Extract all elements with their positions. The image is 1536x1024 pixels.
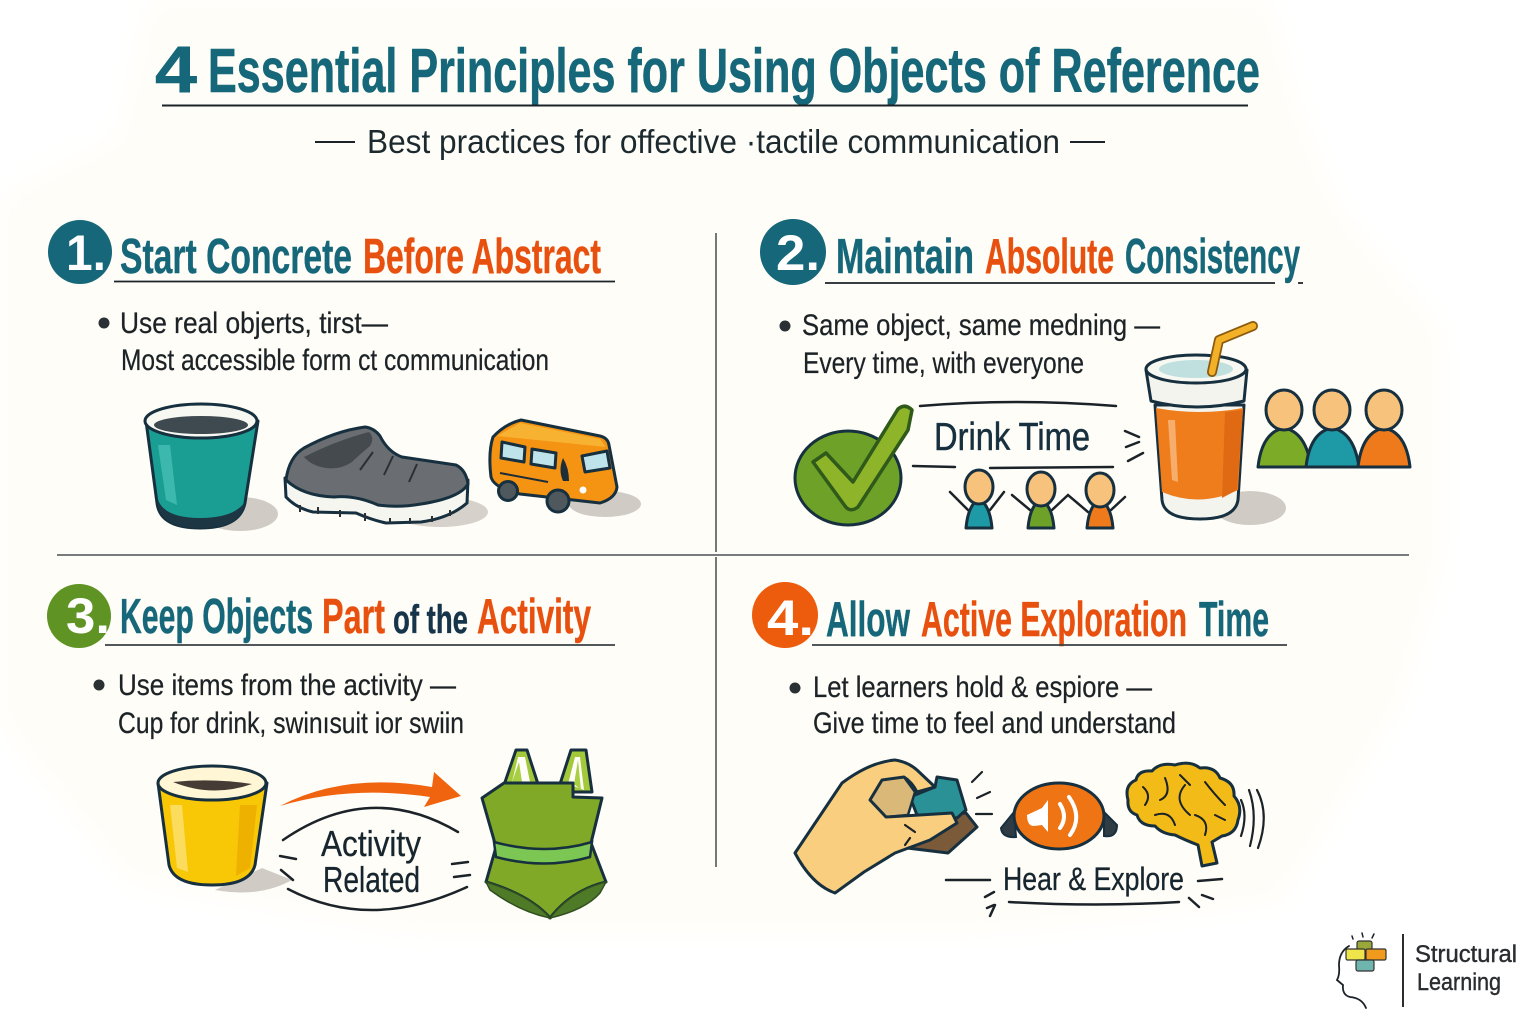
arrow: orange curved arrow (280, 772, 461, 807)
heading 2: Absolute (985, 230, 1114, 284)
logo text: Learning (1417, 969, 1501, 996)
label: drink time: Drink Time (934, 416, 1090, 459)
title: 4 (155, 32, 197, 106)
icon: yellow brain (1127, 763, 1264, 866)
heading 3: Keep Objects (120, 590, 313, 644)
icon: orange bus (490, 420, 641, 517)
icon: yellow cup (158, 766, 292, 892)
number badge 1 (48, 220, 112, 284)
bullet text 3: Cup for drink, swinısuit ior swiin (118, 707, 464, 740)
number badge 3 (47, 584, 111, 648)
icon: teal cup (145, 404, 278, 531)
heading 2: Maintain (836, 230, 974, 284)
heading 2 (825, 230, 1303, 284)
heading 1: Before Abstract (363, 230, 601, 284)
panel 3: keep objects part of activity (47, 584, 615, 918)
bullet text 1 (98, 307, 549, 377)
bullet text 2: Same object, same medning — (802, 309, 1160, 342)
bullet text 2: Every time, with everyone (803, 347, 1084, 380)
icon: orange sound ball (1001, 783, 1117, 849)
bullet text 1: Use real objerts, tirst— (120, 307, 388, 340)
heading 3: Activity (477, 590, 591, 644)
subtitle: Best practices for offective ·tactile communication (367, 123, 1060, 160)
bullet text 4: Give time to feel and understand (813, 707, 1176, 740)
icon: orange drink with straw (1146, 326, 1286, 525)
label: activity related: Related (323, 859, 420, 900)
panel 1: start concrete (48, 220, 641, 531)
label: activity related: Activity (321, 823, 421, 864)
icon: green check (795, 406, 912, 525)
label: hear and explore (946, 861, 1222, 916)
panel 4: allow active exploration (752, 582, 1287, 916)
icon: small people (950, 470, 1125, 528)
heading 4: Time (1199, 593, 1269, 647)
heading 1: Start Concrete (120, 230, 352, 284)
bullet text 4 (790, 671, 1176, 740)
bullet text 3: Use items from the activity — (118, 669, 456, 702)
panel 2: maintain consistency (760, 219, 1410, 528)
icon: three people (1258, 390, 1410, 467)
logo: structural learning (1337, 933, 1517, 1008)
label: drink time (913, 402, 1143, 468)
label: hear and explore: Hear & Explore (1003, 861, 1184, 897)
number badge 1: 1. (66, 225, 106, 281)
heading 2: Consistency (1125, 230, 1300, 284)
heading 3: Part (322, 590, 385, 644)
heading 4 (812, 593, 1287, 647)
logo icon: head with blocks (1337, 933, 1386, 1008)
logo text (1415, 941, 1517, 996)
heading 1 (114, 230, 615, 284)
heading 4: Allow (826, 593, 911, 647)
heading 4: Active Exploration (921, 593, 1187, 647)
bullet text 3 (94, 669, 464, 740)
bullet text 1: Most accessible form ct communication (121, 344, 549, 377)
number badge 4: 4. (767, 590, 814, 646)
bullet text 4: Let learners hold & espiore — (813, 671, 1152, 704)
label: activity related (280, 808, 470, 910)
number badge 2 (760, 219, 826, 285)
number badge 2: 2. (776, 225, 820, 281)
bullet text 2 (780, 309, 1160, 380)
number badge 3: 3. (66, 588, 110, 644)
icon: green swimsuit (482, 750, 606, 918)
icon: grey shoe (285, 427, 488, 527)
icon: hand holding object (795, 760, 992, 893)
heading 3 (105, 590, 615, 645)
heading 3: of the (393, 598, 468, 642)
number badge 4 (752, 582, 818, 648)
logo text: Structural (1415, 941, 1517, 968)
